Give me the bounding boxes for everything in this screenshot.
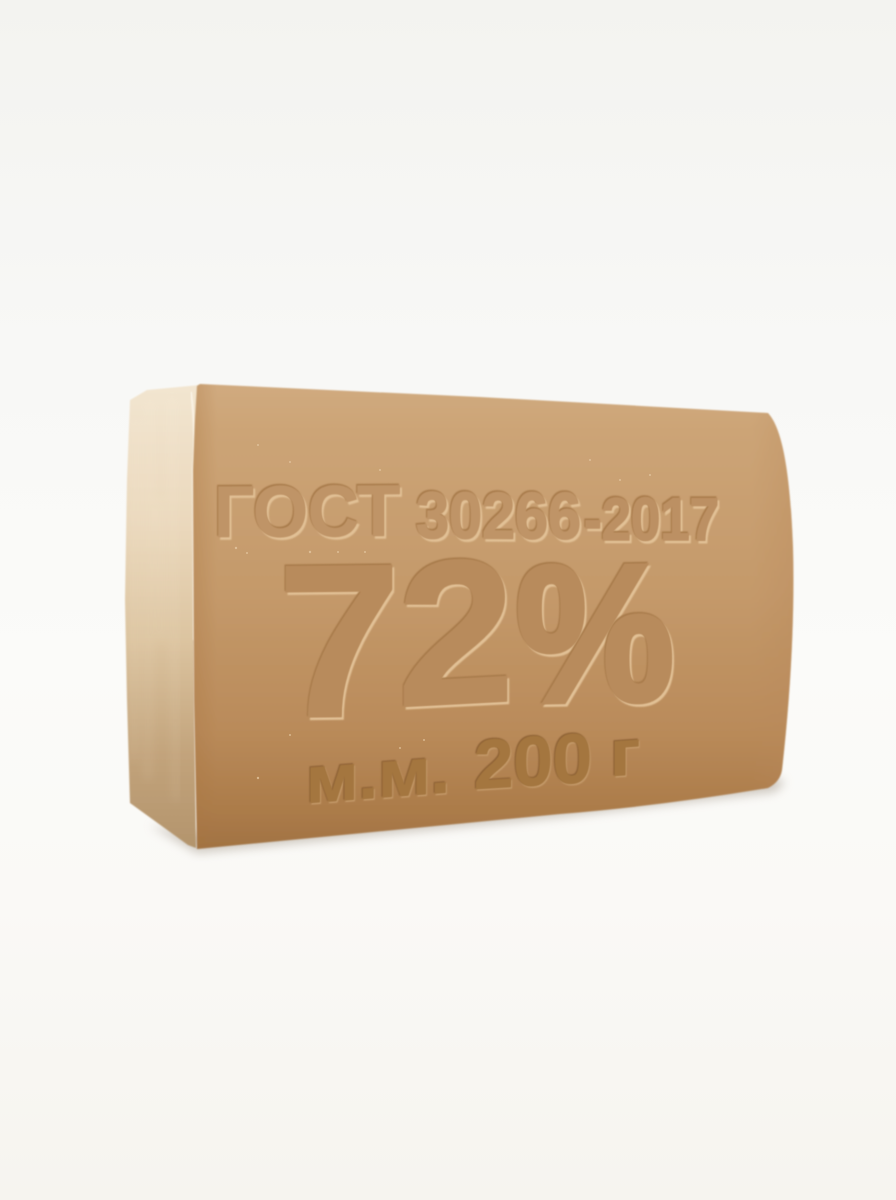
embossed text: weight <box>306 716 640 818</box>
soap front face <box>193 384 793 849</box>
soap left side face <box>125 385 200 848</box>
gram unit: г <box>610 716 640 790</box>
surface speckles <box>235 444 651 779</box>
GOST word: ГОСТ <box>214 472 400 553</box>
embossed text: GOST standard <box>214 472 719 553</box>
m.m.: м.м. <box>306 733 450 818</box>
200 grams: 200 <box>474 719 592 804</box>
standard number: 30266 <box>416 478 581 553</box>
contact shadow under soap <box>150 775 785 853</box>
embossed text: 72 percent <box>277 516 674 764</box>
soap bar <box>125 384 793 849</box>
digit 7: 7 <box>277 520 401 764</box>
percent sign: % <box>516 524 674 744</box>
digit 2: 2 <box>398 516 514 750</box>
standard year: -2017 <box>584 486 719 553</box>
